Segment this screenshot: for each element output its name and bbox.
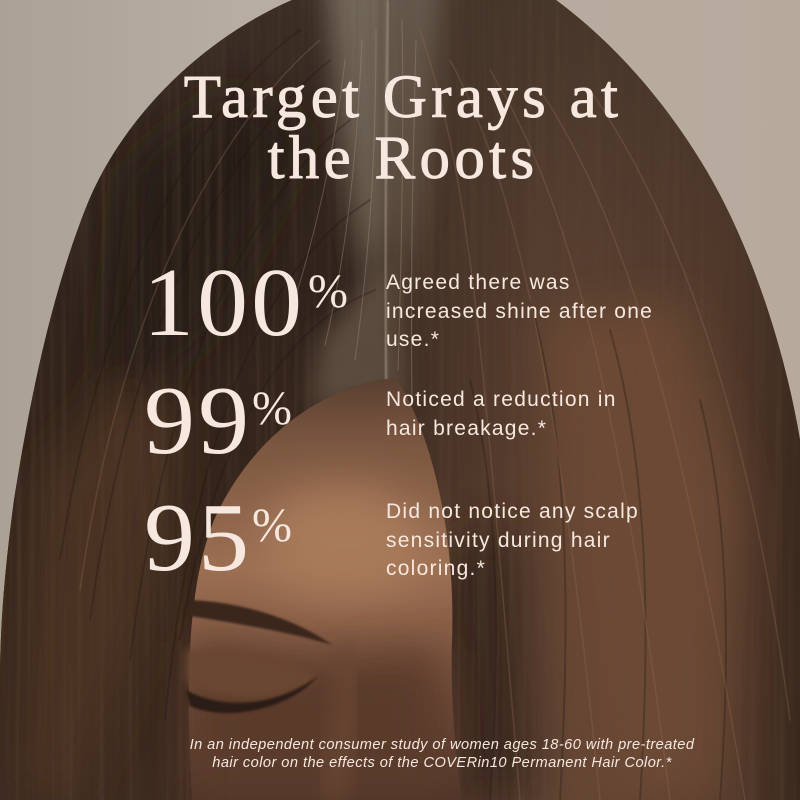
text 99: Noticed a reduction in [386,388,617,411]
footnote: In an independent consumer study of women ages 18-60 with pre-treated [190,737,694,753]
text 95 [386,500,639,580]
text 100: Agreed there was [386,271,571,294]
text 95: sensitivity during hair [386,528,611,552]
eye lid and lashes [186,649,318,699]
title [184,64,622,192]
text 99: hair breakage.* [386,416,547,440]
footnote: hair color on the effects of the COVERin10 Permanent Hair Color.* [212,755,672,771]
percent sign 99: % [252,382,292,435]
number 95: 95 [144,484,252,591]
text 100 [386,271,653,351]
text 99 [386,388,617,440]
text 95: coloring.* [386,557,486,580]
percent sign 100: % [308,265,348,318]
title: Target Grays at [184,64,622,131]
text 100: increased shine after one [386,300,653,322]
title: the Roots [268,125,538,192]
face [186,378,462,800]
eyebrow [190,600,332,645]
text 95: Did not notice any scalp [386,500,639,523]
footnote [190,737,694,771]
text 100: use.* [386,328,440,351]
number 100: 100 [143,249,305,356]
number 99: 99 [144,367,252,474]
percent sign 95: % [252,499,292,552]
